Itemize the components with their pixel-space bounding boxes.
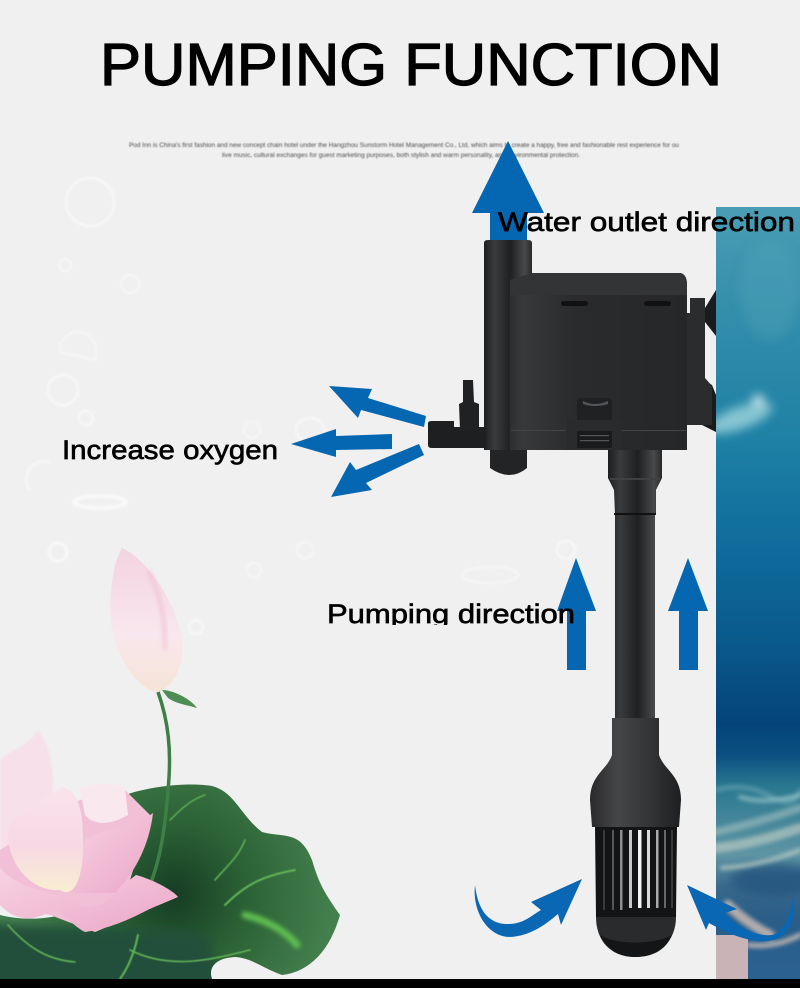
title: PUMPING FUNCTION — [100, 32, 722, 98]
main housing — [500, 273, 687, 450]
strainer slots — [603, 830, 673, 910]
suction cup — [700, 290, 716, 432]
small description text: Pod Inn is China's first fashion and new concept chain hotel under the Hangzhou Sunstorm Hotel Management Co., Ltd, which aims to create a happy, free and fashionable rest experience for ou — [129, 142, 679, 149]
latch — [577, 398, 612, 446]
small description text: live music, cultural exchanges for guest marketing purposes, both stylish and warm personality, and environmental protection. — [222, 152, 580, 159]
lotus bud with stem — [110, 548, 197, 885]
outlet tube — [484, 240, 532, 450]
ocean panel — [716, 207, 800, 979]
lotus flower — [0, 730, 178, 932]
small description text — [129, 142, 679, 159]
bubbles decoration — [26, 178, 575, 634]
arrows: increase oxygen — [291, 386, 426, 497]
arrows: intake swirls — [475, 879, 794, 941]
label: pumping direction: Pumping direction — [327, 599, 575, 629]
lotus leaf — [0, 784, 340, 988]
arrow: water outlet — [472, 141, 544, 240]
bottom black bar — [0, 979, 800, 988]
label: water outlet direction: Water outlet direction — [498, 207, 795, 237]
label: increase oxygen: Increase oxygen — [62, 435, 278, 465]
pumping tube with strainer — [590, 450, 681, 957]
pump body — [428, 240, 716, 475]
air valve — [428, 421, 486, 448]
arrows: pumping direction — [557, 558, 708, 670]
pale reflection — [716, 935, 748, 980]
lower nozzle — [490, 450, 527, 475]
